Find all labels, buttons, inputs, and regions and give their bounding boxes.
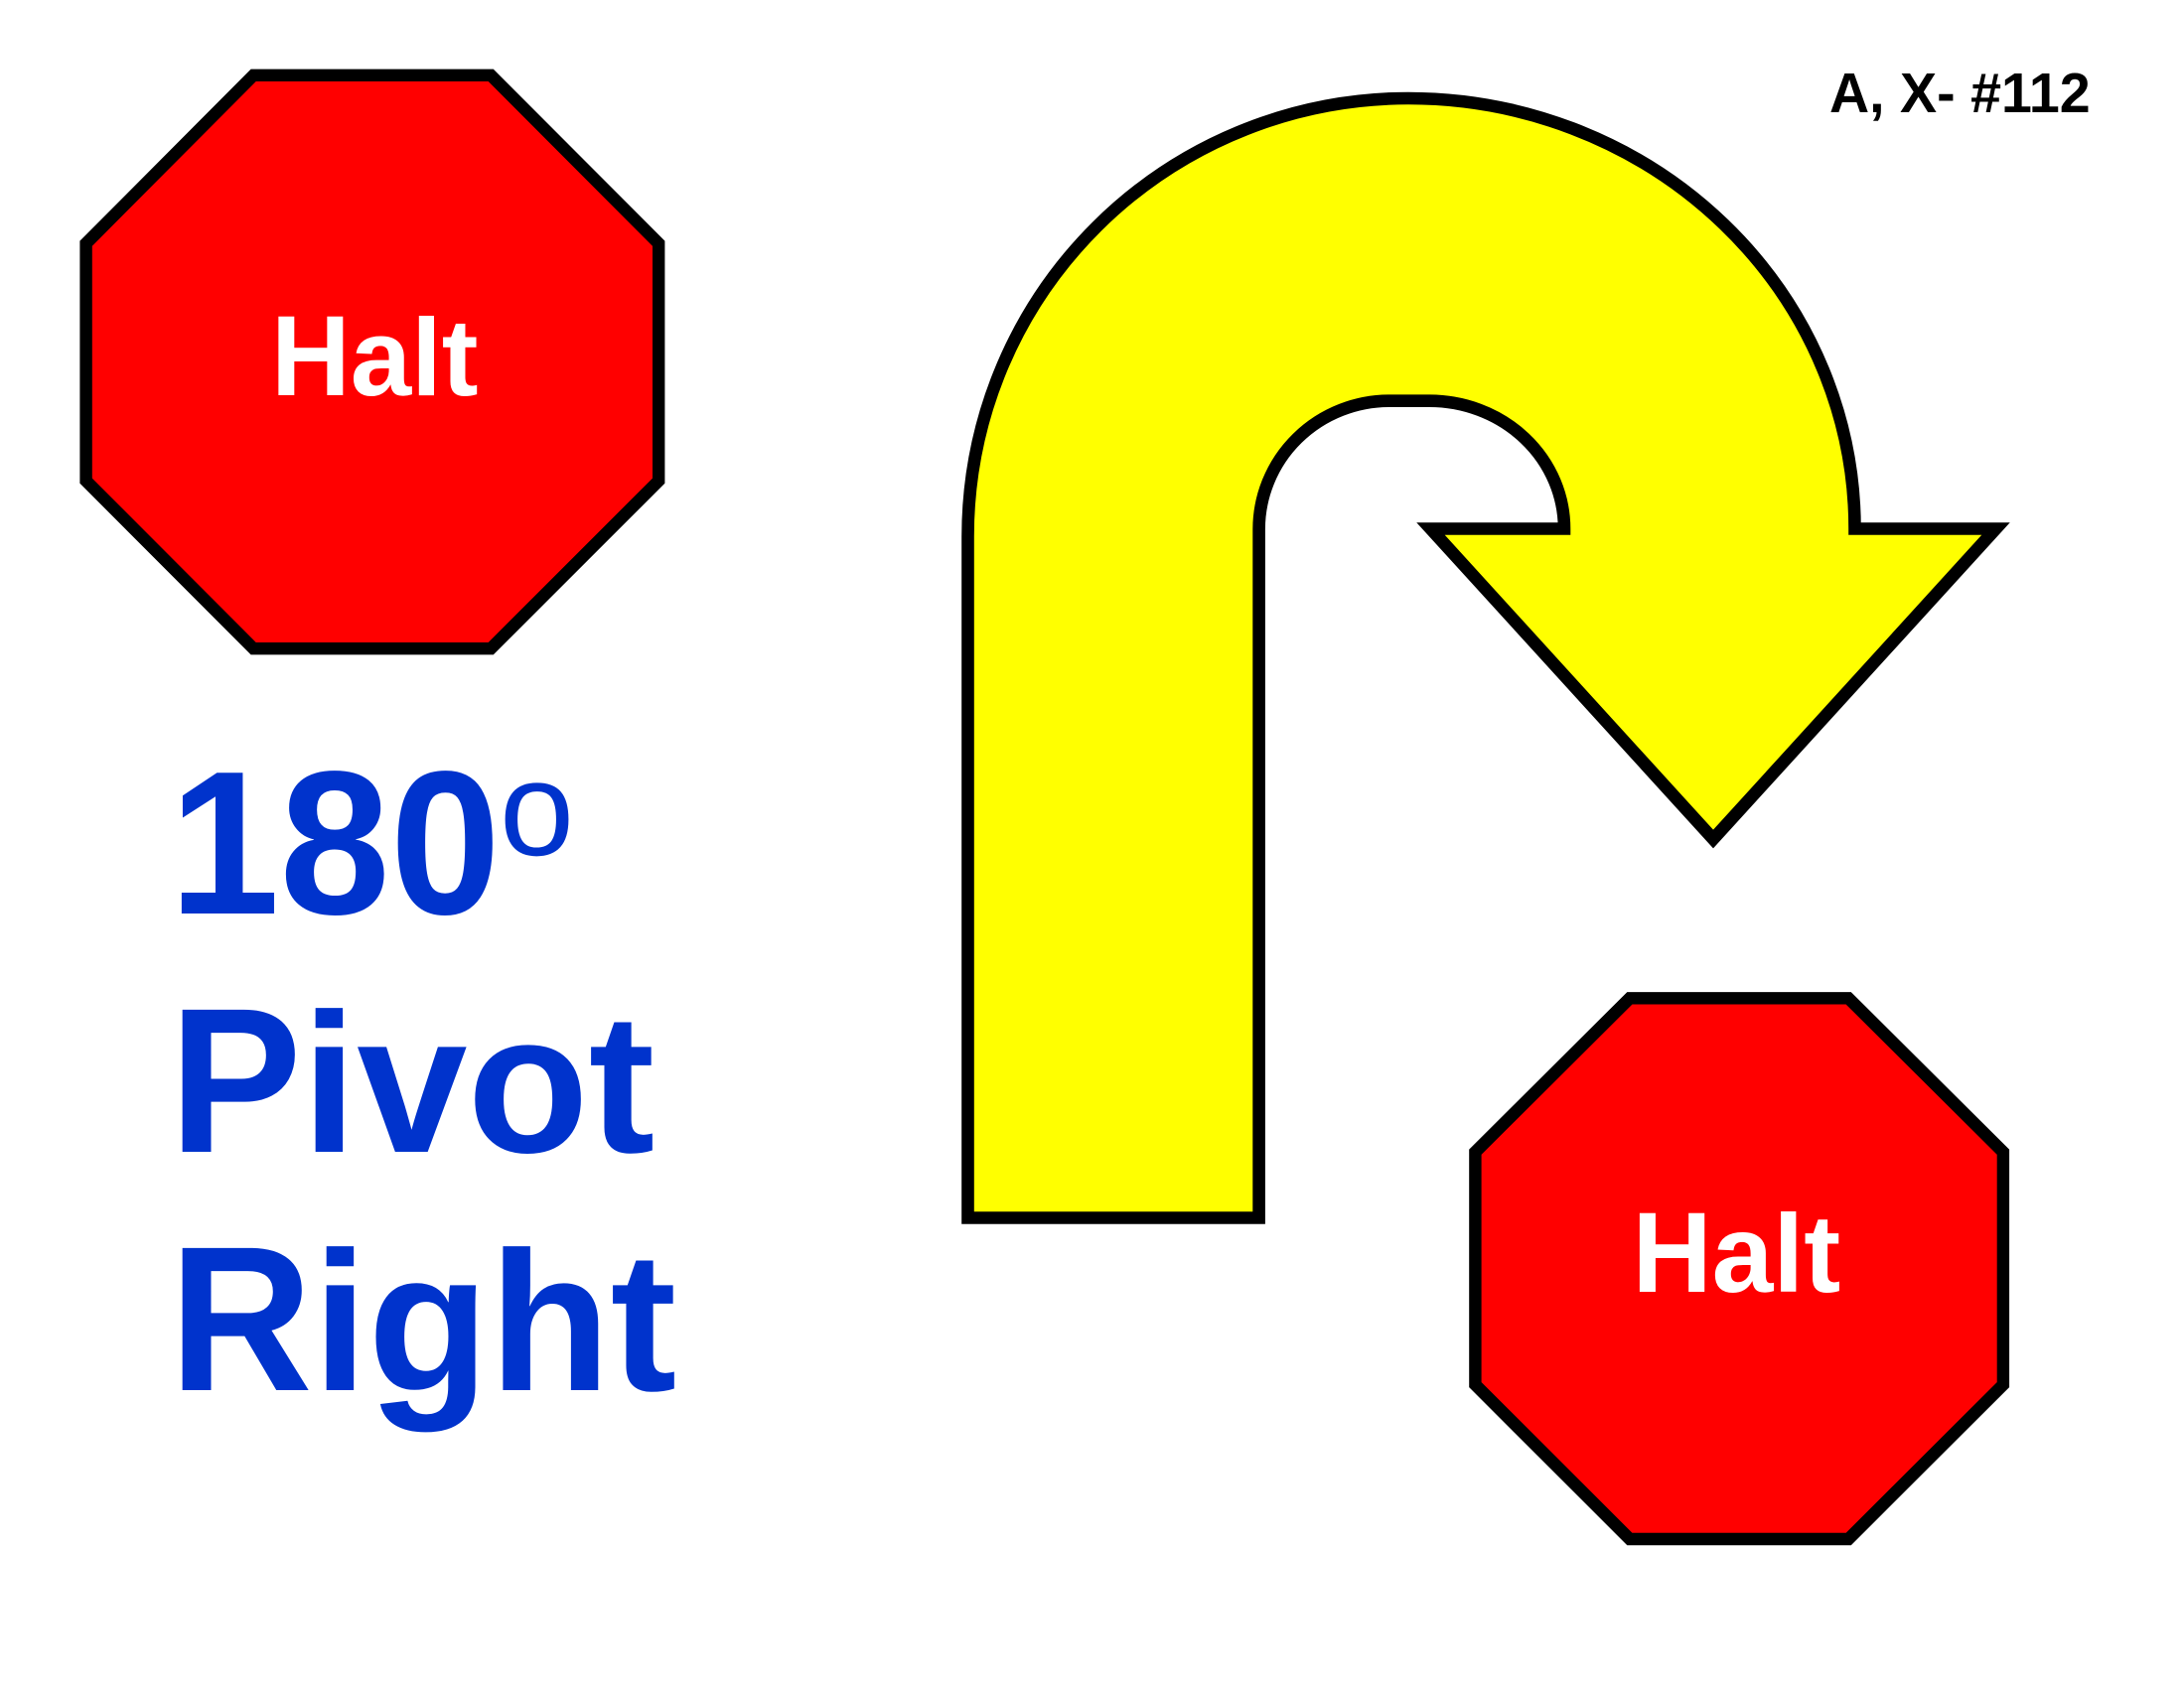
label: Halt (1633, 1189, 1840, 1317)
stop sign: top left (79, 70, 665, 655)
title line: Pivot (169, 966, 655, 1196)
label: Halt: H (1633, 1189, 1712, 1317)
stop sign: bottom right (1469, 992, 2010, 1545)
label: Halt: alt (351, 296, 479, 419)
title line: Right: ight (313, 1211, 676, 1433)
label: Halt (271, 292, 479, 419)
title line: Pivot: P (169, 966, 302, 1196)
degree mark: o (500, 734, 574, 884)
play code: A, X- #112 (1829, 62, 2091, 124)
maneuver title (169, 730, 676, 1434)
title line: Right: R (169, 1203, 313, 1434)
label: Halt: alt (1712, 1193, 1840, 1316)
label: Halt: H (271, 292, 351, 419)
title line: Pivot: ivot (302, 973, 655, 1195)
title line: Right (169, 1203, 676, 1434)
title line: 180: 180 (169, 730, 501, 958)
